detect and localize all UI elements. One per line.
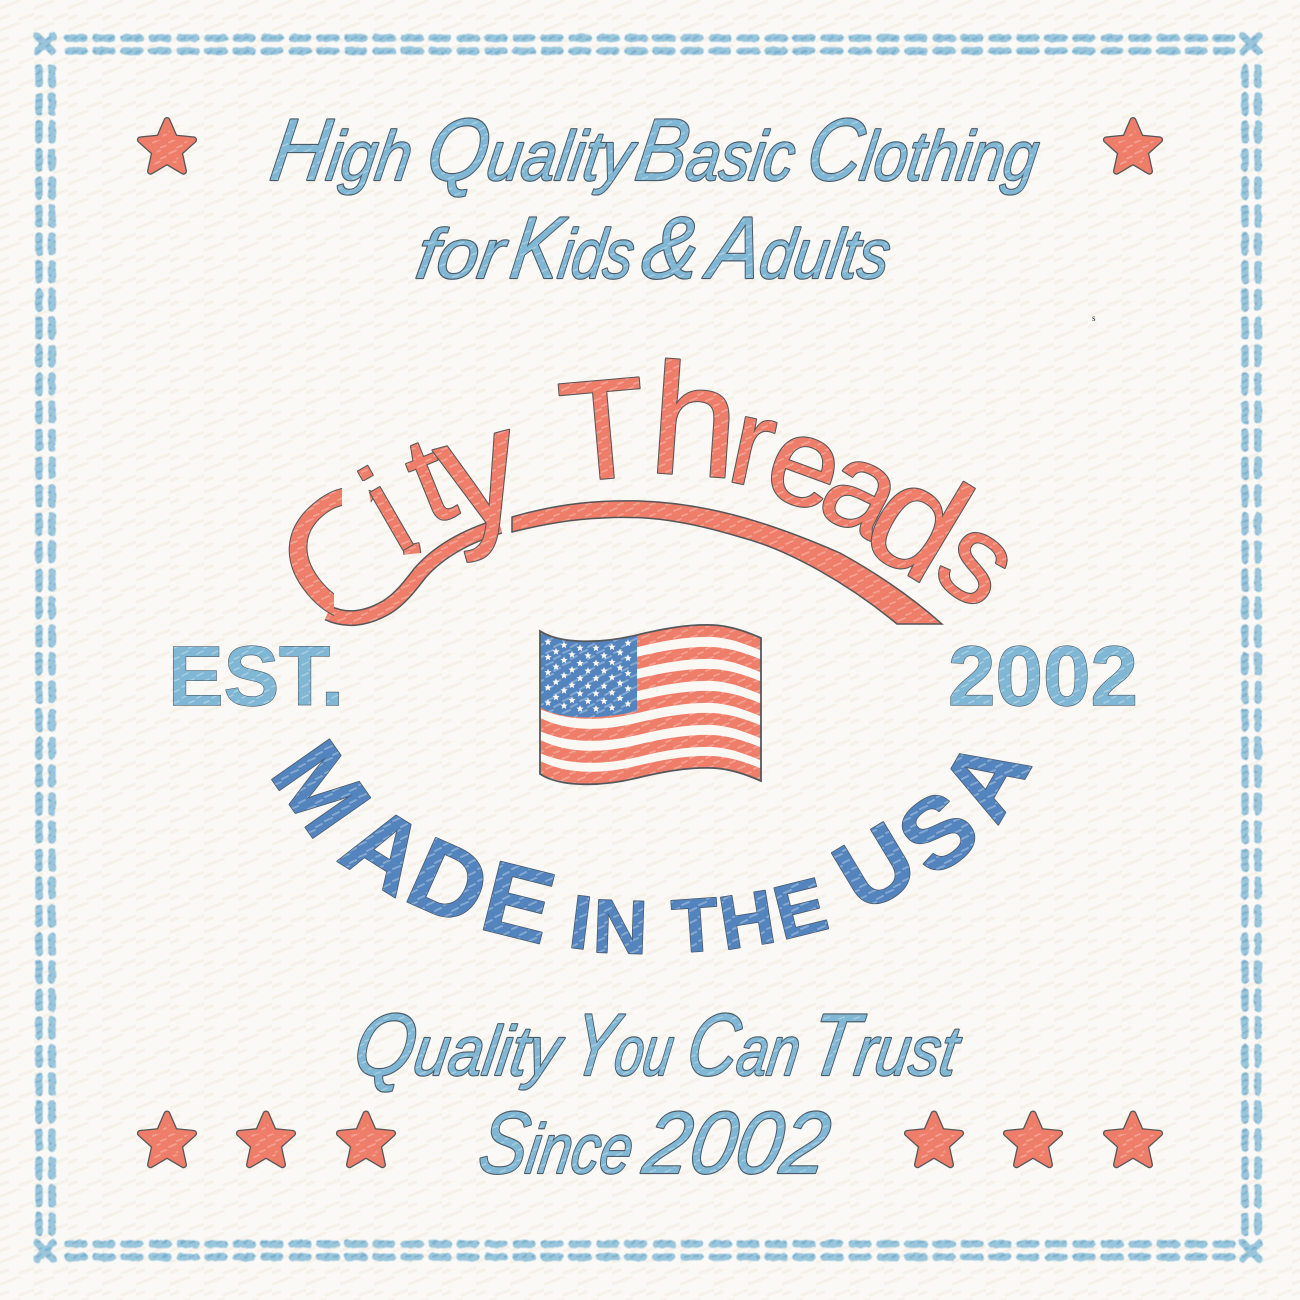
headline: for Kids & Adults: for [412, 214, 513, 293]
brand arc swoosh right [512, 501, 942, 624]
tiny stray letter: s [1092, 313, 1096, 323]
headline: for Kids & Adults: Kids [505, 198, 643, 297]
headline: for Kids & Adults: Adults [699, 198, 899, 297]
icon: star top right [1106, 120, 1160, 171]
icons: three stars bottom right [907, 1114, 1160, 1165]
tagline: Quality You Can Trust: Trust [803, 995, 969, 1094]
tagline: Since 2002: 2002 [637, 1093, 837, 1192]
tagline: Quality You Can Trust: Can [681, 995, 809, 1094]
icon: American flag [530, 625, 771, 784]
tagline: Quality You Can Trust: You [566, 995, 682, 1094]
tagline: Quality You Can Trust [348, 995, 969, 1094]
text: 2002: 2002 [948, 629, 1138, 723]
arched text: MADE IN THE USA: MADE IN THE USA [250, 719, 1052, 972]
icons: three stars bottom left [140, 1114, 393, 1165]
brand swoosh under the C [328, 526, 500, 618]
headline: for Kids & Adults [412, 198, 899, 297]
brand name: City Threads: City Threads [235, 330, 1044, 680]
tagline: Quality You Can Trust: Quality [348, 995, 572, 1094]
headline: for Kids & Adults: & [636, 198, 708, 297]
tagline: Since 2002 [473, 1093, 837, 1192]
headline: High Quality Basic Clothing [265, 100, 1047, 199]
icon: star top left [140, 120, 194, 171]
headline: High Quality Basic Clothing: Basic [630, 100, 804, 199]
headline: High Quality Basic Clothing: High [265, 100, 421, 199]
text: EST.: EST. [168, 629, 344, 723]
tagline: Since 2002: Since [473, 1093, 642, 1192]
headline: High Quality Basic Clothing: Quality [421, 100, 645, 199]
headline: High Quality Basic Clothing: Clothing [801, 100, 1047, 199]
